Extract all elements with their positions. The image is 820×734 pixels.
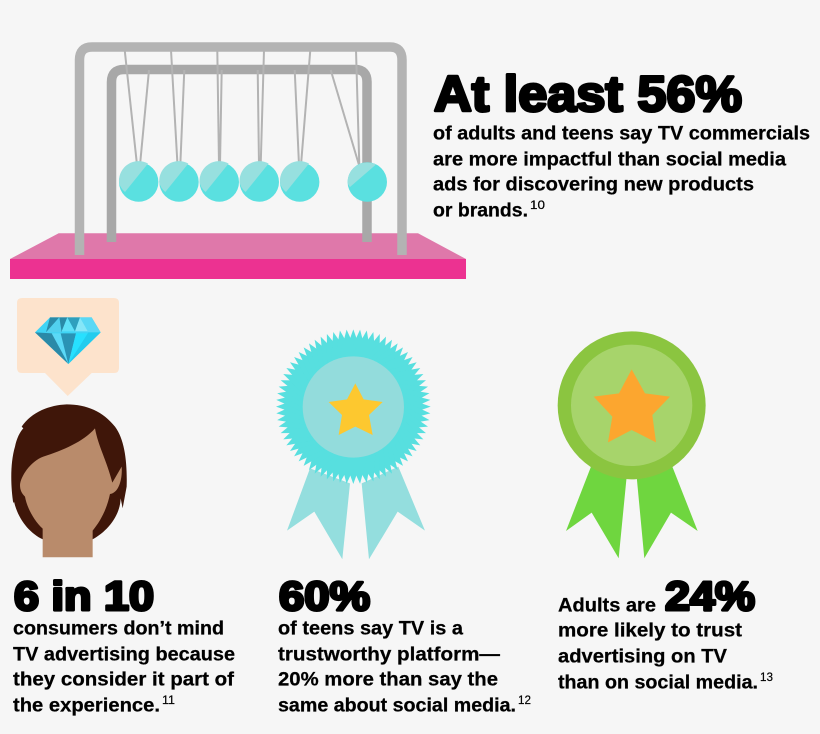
ribbon tails [287,467,425,559]
callout: speech bubble with diamond [17,298,119,396]
heading: at least 56%: At least 56% [434,66,742,122]
icon: diamond [35,317,101,364]
medal center [571,345,692,466]
text block: teens [278,619,531,717]
text block: TV commercials: ads for discovering new products [433,175,754,196]
text block: consumers [13,619,235,717]
cradle base [10,233,466,279]
text block: TV commercials [433,124,810,222]
cradle balls [119,161,387,202]
text block: trust: than on social media. [558,673,758,694]
text block: teens: 20% more than say the [278,670,498,691]
text block: TV commercials: are more impactful than social media [433,150,786,171]
text block: TV commercials: of adults and teens say TV commercials [433,124,810,145]
speech bubble [17,298,119,396]
text block: teens: trustworthy platform— [278,645,500,666]
text block: TV commercials: or brands. [433,201,528,222]
text block: trust: 13 [760,670,773,684]
text: adults are: Adults are [558,596,656,617]
text block: consumers: the experience. [13,696,160,717]
cradle strings [125,50,359,165]
text block: teens: same about social media. [278,696,516,717]
ribbon tails [566,467,698,558]
icon: Newton's cradle [10,47,466,279]
icon: teal rosette ribbon [271,325,435,559]
text block: trust: advertising on TV [558,647,727,668]
heading: 24%: 24% [665,573,755,619]
cradle back frame [112,70,367,242]
text block: teens: of teens say TV is a [278,619,463,640]
text block: consumers: consumers don’t mind [13,619,224,640]
star [329,383,383,435]
icon: person head [11,404,127,557]
medal disc [558,331,706,479]
text block: consumers: 11 [162,693,175,707]
rosette center [303,356,404,458]
cradle front frame [80,47,402,255]
heading: 6 in 10: 6 in 10 [14,573,154,619]
text block: trust: more likely to trust [558,621,743,642]
star [594,369,670,442]
text block: TV commercials: 10 [530,198,545,212]
text block: consumers: they consider it part of [13,670,235,691]
rosette burst [271,325,435,489]
text block: teens: 12 [518,693,531,707]
text block: trust [558,621,773,694]
icon: green medal [558,331,706,558]
heading: 60%: 60% [279,573,370,619]
text block: consumers: TV advertising because [13,645,235,666]
